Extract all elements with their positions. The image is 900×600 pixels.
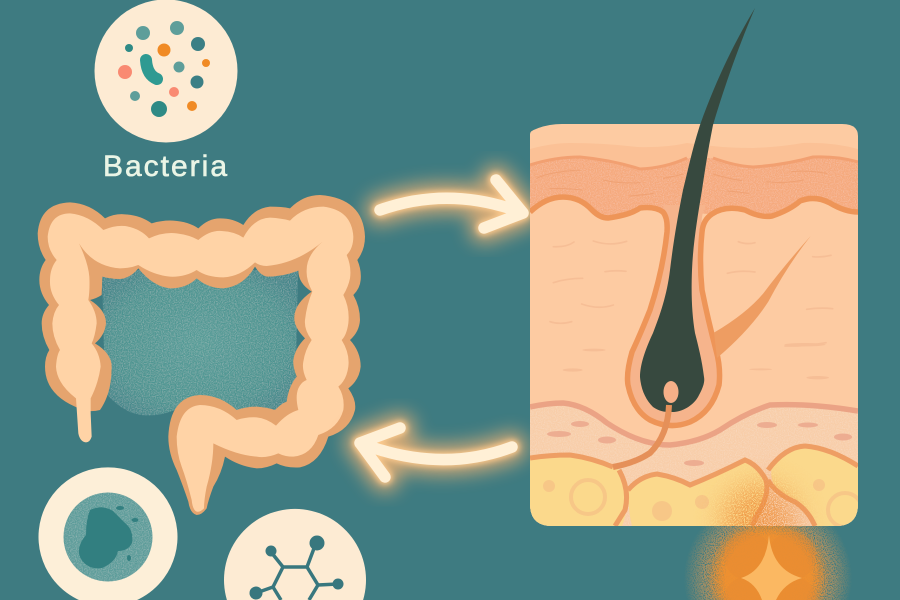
skin wrinkle marks: [537, 170, 833, 346]
large intestine: [38, 195, 365, 515]
hypodermis layer: [530, 403, 858, 526]
icon: immune cell circle: [39, 467, 178, 600]
heading: Bacteria label: Bacteria: [103, 150, 227, 183]
icon: bacteria circle: [94, 0, 238, 142]
epidermis top line: [530, 157, 858, 169]
icon: four-point star: [741, 535, 802, 600]
hair papilla and nerve stalk: [613, 381, 678, 467]
panel: skin cross-section: [530, 124, 862, 560]
colon inner lumen: [48, 207, 353, 512]
glow: orange spark: [684, 526, 852, 600]
epidermis layer: [530, 157, 858, 218]
stratum corneum band: [530, 143, 858, 168]
colon outer wall: [38, 195, 365, 515]
hair shaft and bulb: [640, 8, 755, 412]
arrow: gut to skin: [380, 180, 523, 228]
follicle and dermal boundary line: [530, 197, 858, 426]
dermis base: [530, 124, 858, 526]
arrow: skin to gut: [360, 428, 512, 477]
icon: molecule circle: [224, 509, 366, 600]
fat layer: [530, 446, 862, 527]
arrector pili muscle: [714, 236, 811, 358]
teal patch inside colon: [102, 270, 298, 416]
pink membrane band: [530, 403, 858, 445]
hypodermis cell spots: [547, 421, 852, 466]
lower dermis wrinkle marks: [563, 343, 829, 379]
follicle sheath: [628, 205, 720, 426]
glow inside panel: [722, 484, 798, 560]
